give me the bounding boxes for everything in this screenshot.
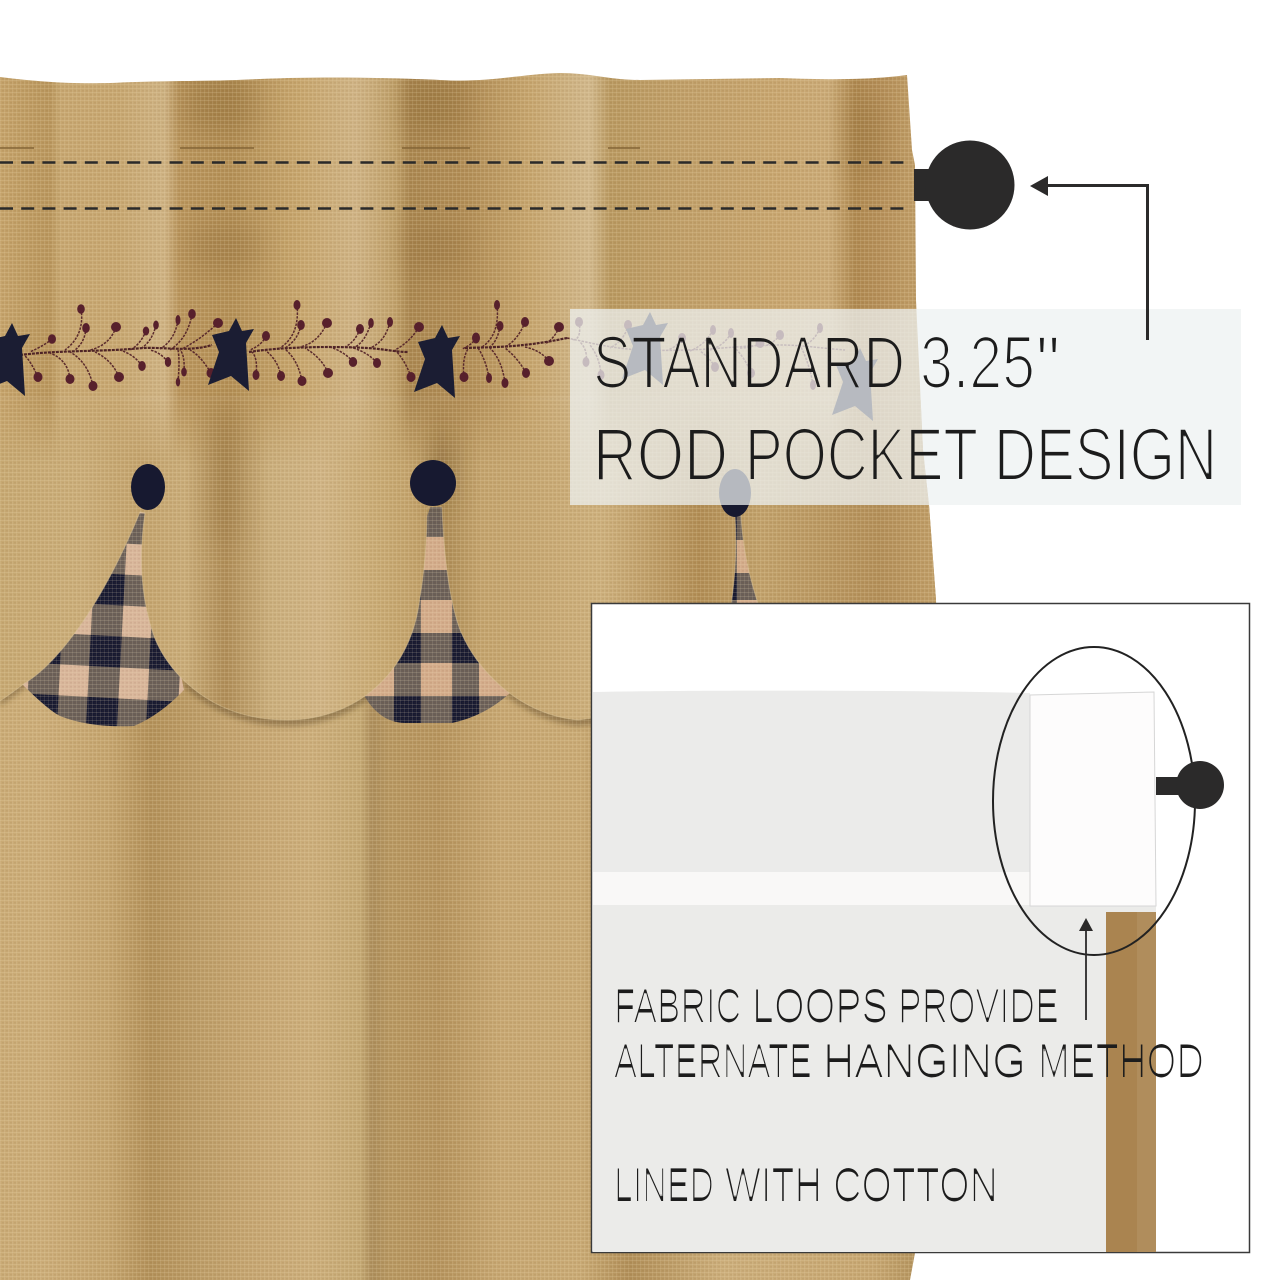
inset labels: LINED	[614, 1158, 714, 1211]
inset labels: PROVIDE	[898, 979, 1059, 1032]
heading: rod pocket: STANDARD	[593, 321, 905, 404]
white band	[593, 872, 1030, 905]
plaid lining left	[22, 510, 184, 726]
small rod icon	[1156, 761, 1224, 809]
fabric buttons	[131, 460, 751, 517]
heading: rod pocket: DESIGN	[994, 413, 1217, 496]
inset background	[592, 604, 1250, 1252]
heading: rod pocket: 3.25	[920, 321, 1035, 404]
inset labels: COTTON	[833, 1158, 998, 1211]
curtain side hem	[1137, 912, 1156, 1252]
inset labels: ALTERNATE	[614, 1034, 812, 1087]
stars	[0, 312, 878, 421]
vine main stem	[20, 338, 567, 355]
heading: rod pocket: POCKET	[745, 413, 978, 496]
fold shadows	[185, 78, 880, 540]
translucent label background	[570, 309, 1241, 505]
inset labels: WITH	[725, 1158, 822, 1211]
plaid lining center	[365, 505, 510, 723]
heading: rod pocket	[593, 321, 1217, 496]
small arrow	[1079, 918, 1093, 1020]
curtain body fabric	[0, 440, 960, 1280]
curtain header fabric	[0, 73, 921, 446]
circled loop area	[993, 647, 1195, 955]
pocket tuck lines	[0, 147, 640, 149]
inset labels: HANGING	[823, 1034, 1026, 1087]
plaid lining right	[731, 515, 758, 603]
panel: lining detail inset	[592, 604, 1250, 1252]
inset labels	[614, 979, 1204, 1211]
berries	[34, 300, 823, 391]
inset labels: METHOD	[1038, 1034, 1204, 1087]
valance shadow	[0, 510, 591, 728]
rod icon	[914, 140, 1014, 230]
rod pocket stitching	[0, 162, 910, 208]
curtain side edge	[1106, 912, 1156, 1252]
weave texture	[0, 60, 960, 1280]
embroidered berry vine	[0, 300, 878, 421]
heading: rod pocket: "	[1036, 321, 1060, 404]
vine stems under overlay	[567, 326, 845, 380]
linen lining	[593, 691, 1030, 872]
panel: curtain photo	[0, 60, 960, 1280]
vine branches	[24, 310, 558, 382]
heading: rod pocket: ROD	[593, 413, 728, 496]
scalloped valance	[0, 400, 960, 720]
inset labels: FABRIC	[614, 979, 741, 1032]
fabric loop	[1030, 692, 1156, 906]
inset labels: LOOPS	[752, 979, 888, 1032]
arrow to rod	[1030, 176, 1148, 340]
linen lining lower	[593, 905, 1156, 1252]
